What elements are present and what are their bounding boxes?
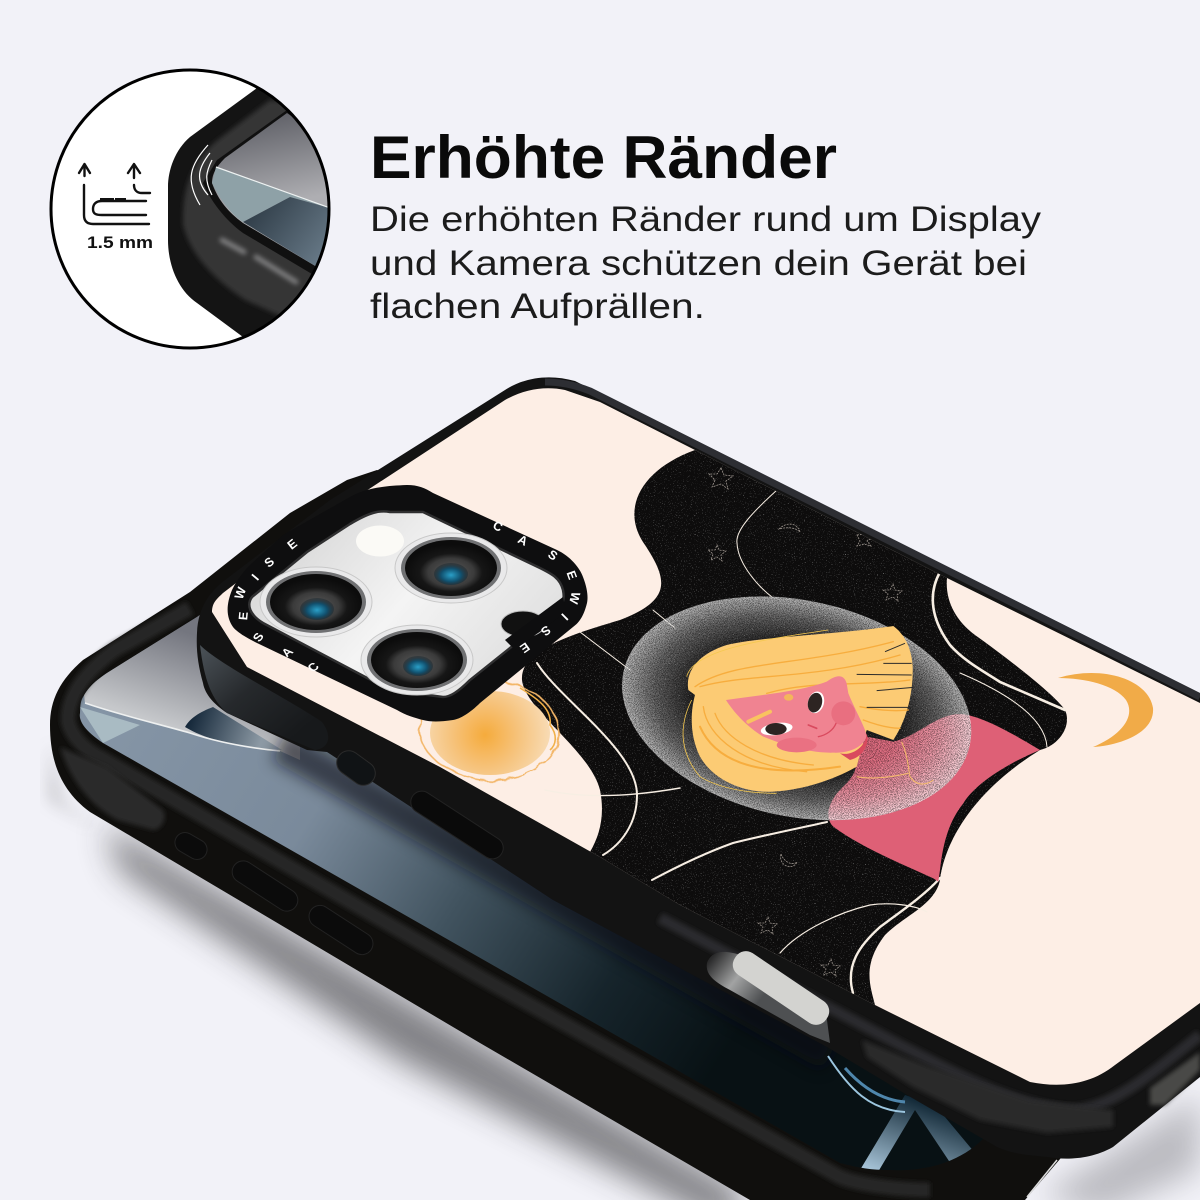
helmet	[622, 596, 972, 820]
brand ring text	[232, 518, 583, 675]
top edge sheen	[545, 382, 1200, 697]
lower phone highlight strip	[68, 608, 930, 1190]
upper phone frame	[197, 377, 1200, 1159]
brand ring text: C	[491, 518, 505, 535]
neck shadow	[840, 733, 868, 760]
brand ring text: E	[285, 536, 300, 552]
lower corner pad	[60, 747, 165, 830]
button: silent switch	[332, 746, 380, 790]
side button 1	[171, 829, 211, 863]
brand ring text: S	[538, 623, 553, 639]
brow and forehead mark	[748, 712, 770, 722]
side button 3	[305, 901, 377, 959]
brand ring text: C	[304, 660, 322, 675]
lens 2	[395, 533, 507, 603]
loose hair wisps	[683, 630, 828, 793]
LiDAR	[501, 611, 545, 637]
side button 2	[228, 857, 302, 915]
eyes	[808, 692, 824, 714]
blue light streaks	[861, 1095, 972, 1170]
helmet stipple	[613, 590, 980, 827]
impact arcs	[191, 145, 212, 205]
body text: Die erhöhten Ränder rund um Display	[370, 200, 1042, 239]
flowing lines	[537, 490, 1065, 993]
dark hair gaps	[857, 643, 913, 707]
pad	[862, 1040, 1113, 1133]
inset ring	[51, 70, 329, 348]
character	[622, 596, 1040, 882]
hair	[688, 626, 913, 792]
cheeks	[831, 701, 855, 725]
brand ring text: W	[232, 585, 249, 601]
speaker detail	[1150, 1052, 1200, 1105]
mouth	[818, 723, 836, 737]
body text: und Kamera schützen dein Gerät bei	[370, 244, 1027, 283]
brand ring text: A	[516, 532, 530, 549]
inset screen	[212, 113, 328, 266]
camera module	[228, 485, 588, 722]
brand ring text: W	[566, 590, 583, 606]
bumper overlap on LiDAR	[505, 597, 566, 650]
body text: flachen Aufprällen.	[370, 287, 705, 326]
art base	[200, 370, 1200, 1100]
body text	[370, 200, 1042, 326]
upper phone	[197, 377, 1200, 1159]
heading: Erhöhte Ränder	[370, 124, 837, 191]
thin reflected edge	[1027, 1160, 1057, 1197]
brand ring text: S	[250, 630, 267, 644]
lower phone display	[80, 615, 972, 1170]
silver button	[707, 946, 834, 1043]
brand ring text: E	[236, 611, 251, 621]
inset reflections	[222, 240, 296, 282]
icon: raised edge diagram	[79, 164, 150, 224]
shadow cast by upper phone	[264, 735, 703, 991]
camera bumper	[228, 485, 588, 722]
left pad	[200, 645, 328, 750]
flash	[356, 526, 404, 556]
brand ring text: I	[558, 610, 571, 623]
icon: camera bumps	[100, 198, 126, 201]
inset circle: raised edge detail	[51, 70, 340, 348]
lower phone frame	[50, 470, 1072, 1200]
phone artwork	[200, 370, 1200, 1100]
face	[726, 676, 867, 753]
brand ring text: E	[564, 569, 580, 581]
lower phone	[50, 470, 1072, 1200]
moon	[1058, 673, 1153, 747]
hair strands	[695, 642, 910, 772]
brand ring text: E	[517, 639, 532, 656]
necklace	[857, 742, 933, 784]
sun	[416, 675, 562, 785]
lens 1	[260, 567, 372, 637]
button: side	[407, 787, 507, 863]
label: 1.5 mm: 1.5 mm	[87, 233, 153, 252]
inset phone corner	[168, 88, 340, 337]
lens 3	[361, 625, 473, 695]
brand ring text: S	[545, 547, 560, 564]
camera window	[249, 511, 564, 697]
black wave	[522, 440, 1067, 1020]
stars and moons	[708, 468, 902, 976]
brand ring text: S	[262, 554, 277, 570]
dress	[828, 714, 1040, 882]
upper phone highlight strip	[660, 918, 1200, 1110]
brand ring text: A	[278, 645, 296, 660]
speckle grain	[520, 440, 1080, 1020]
brand ring text: I	[249, 571, 262, 583]
shadow under phones	[50, 740, 1200, 1200]
